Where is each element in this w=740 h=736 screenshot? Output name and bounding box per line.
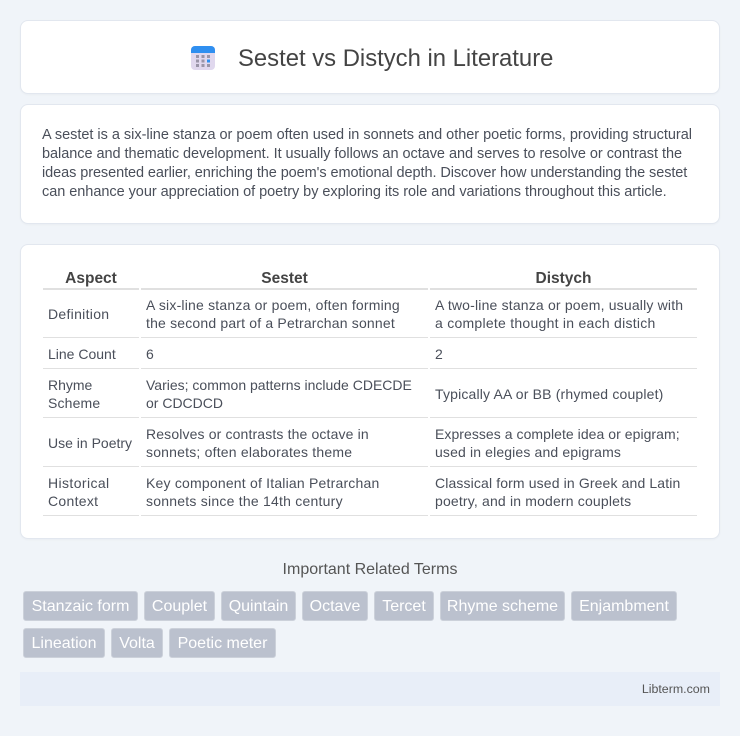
comparison table: Distych <box>536 270 592 287</box>
intro paragraph: A sestet is a six-line stanza or poem often used in sonnets and other poetic forms, providing structural <box>42 127 692 143</box>
related term tags: Quintain <box>229 598 288 615</box>
related term tags: Tercet <box>382 598 426 615</box>
icon: calendar <box>191 46 215 70</box>
related term tags: Poetic meter <box>178 635 267 652</box>
comparison table: Expresses a complete idea or epigram; <box>435 426 680 442</box>
comparison table: Use in Poetry <box>48 435 132 451</box>
comparison table panel <box>20 244 720 539</box>
comparison table: Aspect <box>65 270 117 287</box>
comparison table: used in elegies and epigrams <box>435 444 621 460</box>
footer bar <box>20 672 720 706</box>
comparison table: Historical <box>48 475 110 491</box>
comparison table: Key component of Italian Petrarchan <box>146 475 379 491</box>
related term tags: Octave <box>310 598 360 615</box>
related term tags: Couplet <box>152 598 207 615</box>
related terms heading: Important Related Terms <box>283 561 457 578</box>
comparison table: poetry, and in modern couplets <box>435 493 631 509</box>
comparison table: Context <box>48 493 98 509</box>
intro paragraph <box>42 127 692 200</box>
comparison table: the second part of a Petrarchan sonnet <box>146 315 395 331</box>
comparison table: Classical form used in Greek and Latin <box>435 475 680 491</box>
comparison table: Resolves or contrasts the octave in <box>146 426 369 442</box>
title card <box>20 20 720 94</box>
comparison table: Sestet <box>261 270 308 287</box>
comparison table: or CDCDCD <box>146 395 223 411</box>
related term tags: Lineation <box>32 635 96 652</box>
intro paragraph: balance and thematic development. It usually follows an octave and serves to resolve or contrast the <box>42 146 682 162</box>
comparison table: Definition <box>48 306 109 322</box>
comparison table: a complete thought in each distich <box>435 315 656 331</box>
comparison table: 2 <box>435 346 443 362</box>
title: Sestet vs Distych in Literature <box>238 45 553 72</box>
related term tags: Volta <box>119 635 155 652</box>
related term tags <box>23 591 677 658</box>
footer source: Libterm.com <box>642 682 710 696</box>
comparison table: A two-line stanza or poem, usually with <box>435 297 683 313</box>
comparison table: sonnets since the 14th century <box>146 493 343 509</box>
comparison table: Scheme <box>48 395 100 411</box>
comparison table: Line Count <box>48 346 116 362</box>
comparison table <box>43 270 697 516</box>
intro text panel <box>20 104 720 224</box>
comparison table: Typically AA or BB (rhymed couplet) <box>435 386 664 402</box>
comparison table: 6 <box>146 346 154 362</box>
comparison table: sonnets; often elaborates theme <box>146 444 352 460</box>
comparison table: Rhyme <box>48 377 92 393</box>
related term tags: Stanzaic form <box>32 598 129 615</box>
intro paragraph: ideas presented earlier, enriching the poem's emotional depth. Discover how understanding the sestet <box>42 165 687 181</box>
related term tags: Rhyme scheme <box>447 598 558 615</box>
intro paragraph: can enhance your appreciation of poetry by exploring its role and variations throughout this article. <box>42 184 667 200</box>
comparison table: A six-line stanza or poem, often forming <box>146 297 400 313</box>
related term tags: Enjambment <box>579 598 669 615</box>
comparison table: Varies; common patterns include CDECDE <box>146 377 412 393</box>
